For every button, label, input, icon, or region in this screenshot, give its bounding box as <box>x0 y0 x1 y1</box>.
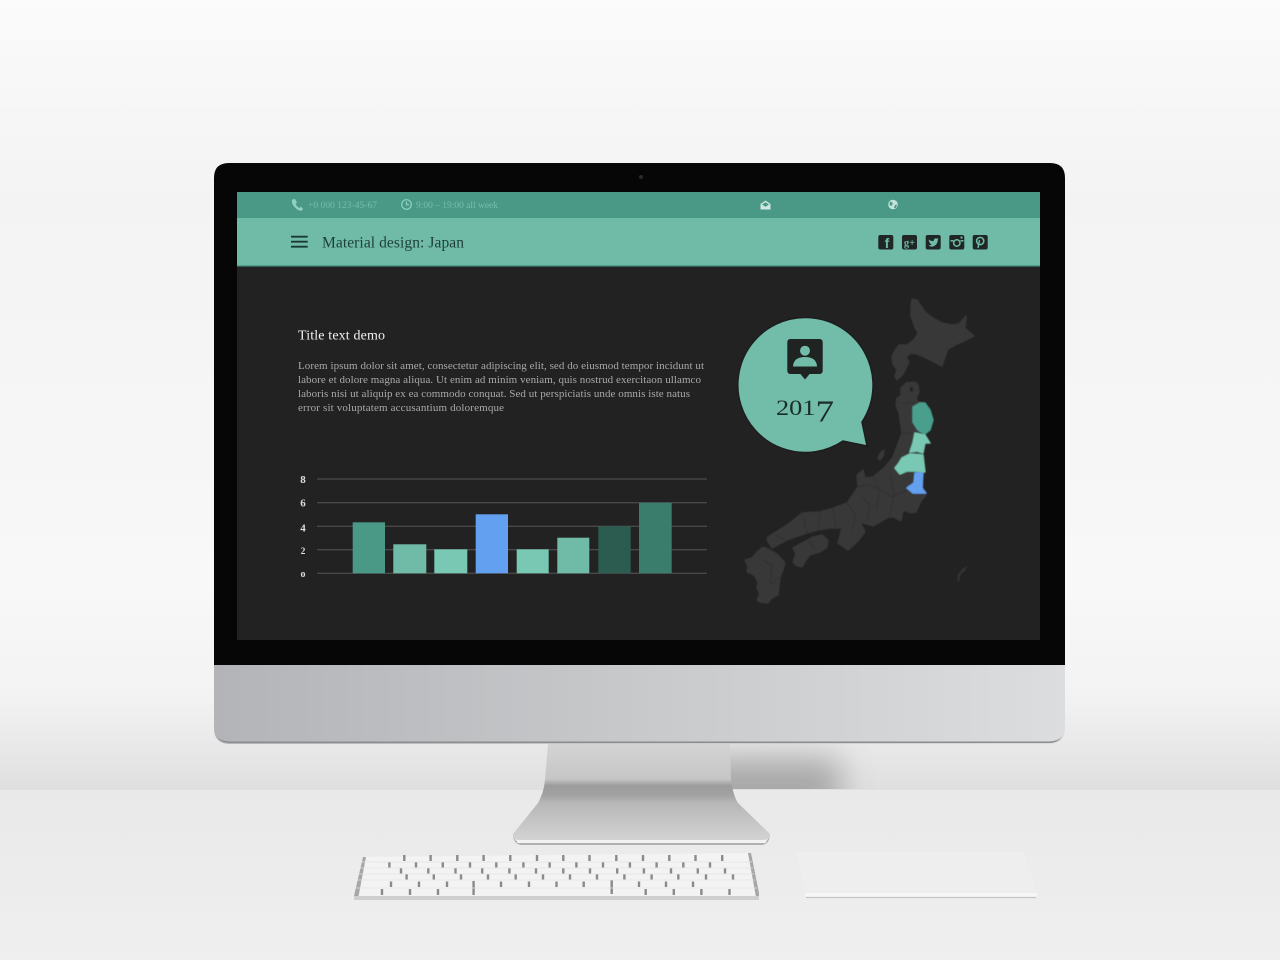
map: Honshu <box>767 382 926 550</box>
icon: globe <box>888 200 898 209</box>
y axis labels: 6 <box>300 498 306 510</box>
paragraph: labore et dolore magna aliqua. Ut enim ad minim veniam, quis nostrud exercitaon ullamco <box>298 374 702 386</box>
y axis labels: 8 <box>300 474 306 486</box>
map: Okinawa islands <box>957 566 967 582</box>
opening hours: 9:00 – 19:00 all week <box>416 201 498 211</box>
map: Kyushu <box>745 547 785 603</box>
keyboard <box>354 853 759 900</box>
paragraph: laboris nisi ut aliquip ex ea commodo conquat. Sed ut perspiciatis unde omnis iste natus <box>298 388 690 400</box>
y axis labels: o <box>300 569 306 580</box>
map: Miyagi highlighted <box>910 433 930 453</box>
map: prefecture borders <box>762 403 916 585</box>
paragraph <box>298 360 704 414</box>
map: Shikoku <box>793 535 828 567</box>
monitor stand <box>513 744 770 845</box>
camera <box>639 175 643 179</box>
screen background <box>237 192 1040 640</box>
map of Japan <box>745 299 974 603</box>
monitor body <box>214 163 1065 744</box>
icon: person pin <box>787 339 823 380</box>
top contact bar <box>237 192 1040 218</box>
map: Sado island <box>878 450 884 460</box>
y axis labels: 4 <box>300 522 306 534</box>
callout bubble <box>738 317 873 452</box>
icon: facebook <box>878 235 893 251</box>
monitor bezel <box>214 163 1065 665</box>
trackpad <box>797 852 1037 898</box>
paragraph: error sit voluptatem accusantium doloremque <box>298 402 504 414</box>
icon: menu <box>291 237 308 247</box>
bar chart <box>300 474 707 580</box>
icon: google plus <box>902 235 917 250</box>
icon: facebook: f <box>885 235 890 251</box>
bars <box>353 503 672 573</box>
year label: 7 <box>815 394 834 428</box>
map: Hokkaido <box>892 299 974 380</box>
header title: Material design: Japan <box>322 234 464 252</box>
icon: clock <box>402 200 411 209</box>
text block <box>298 328 704 414</box>
map: Fukushima highlighted <box>895 454 925 474</box>
heading: Title text demo <box>298 328 385 344</box>
paragraph: Lorem ipsum dolor sit amet, consectetur adipiscing elit, sed do eiusmod tempor incidunt ut <box>298 360 704 372</box>
year label: 201 <box>776 395 809 420</box>
map: Ibaraki highlighted <box>907 473 926 493</box>
monitor chin <box>214 664 1065 744</box>
y axis labels: 2 <box>301 547 306 557</box>
background: wall and desk <box>0 725 1280 902</box>
phone number: +0 000 123-45-67 <box>308 201 377 211</box>
map: Iwate highlighted <box>913 403 933 434</box>
icon: instagram <box>949 235 964 250</box>
header bar <box>237 218 1040 266</box>
icon: phone <box>292 199 303 211</box>
keyboard key gaps <box>382 855 733 895</box>
icon: envelope <box>760 200 770 210</box>
monitor mockup infographic <box>0 163 1280 902</box>
icon: google plus: g+ <box>904 238 915 249</box>
icon: twitter <box>926 235 941 250</box>
y axis labels <box>300 474 306 580</box>
icon: pinterest <box>973 235 988 250</box>
